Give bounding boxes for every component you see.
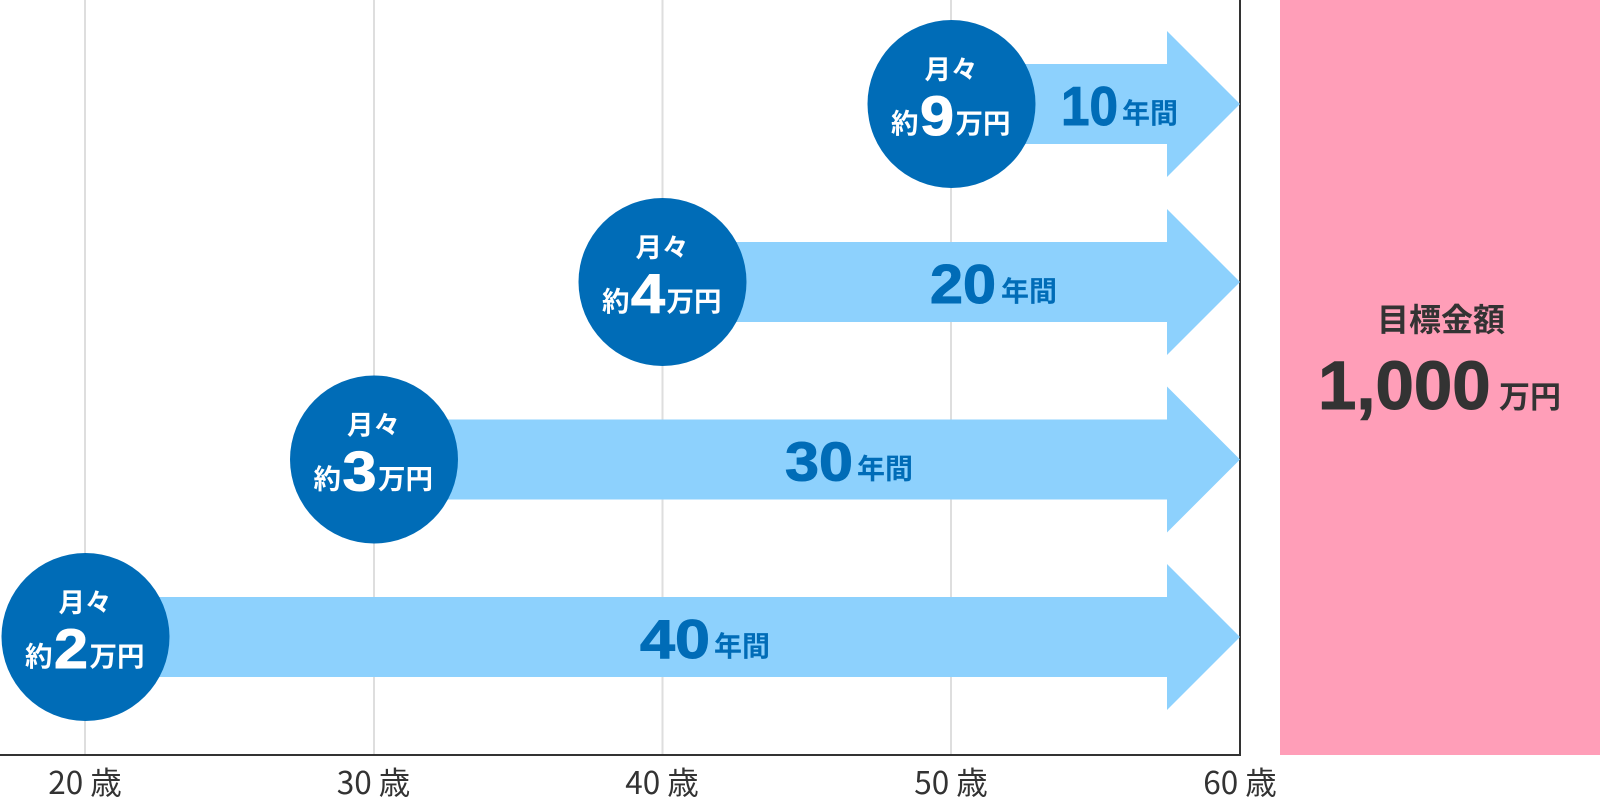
badge: monthly 9万円: [868, 20, 1036, 188]
arrow: 40 years: [85, 564, 1240, 710]
arrow: 20 years: [662, 209, 1240, 355]
arrow: 10 years: [951, 31, 1240, 177]
duration label: 40 years: 40: [640, 608, 710, 670]
duration label: 20 years: 20: [930, 253, 996, 315]
duration label: 30 years: 年間: [857, 454, 913, 484]
badge: monthly 3万円: 3: [342, 440, 376, 502]
duration label: 10 years: 年間: [1122, 98, 1178, 129]
badge: monthly 9万円: 約: [891, 108, 918, 139]
duration label: 40 years: [640, 608, 770, 670]
badge: monthly 4万円: 約: [602, 286, 630, 317]
badge: monthly 2万円: 月々: [58, 588, 112, 618]
target amount value: 1,000: [1318, 347, 1491, 424]
badge: monthly 3万円: 万円: [378, 464, 433, 494]
duration label: 20 years: [930, 253, 1057, 315]
badge: monthly 2万円: 万円: [90, 641, 144, 672]
age axis labels: [48, 758, 1277, 800]
panel: target amount: [1280, 0, 1600, 755]
badge: monthly 4万円: 月々: [636, 233, 688, 263]
badge: monthly 9万円: 万円: [956, 108, 1010, 139]
arrow: 30 years: [374, 386, 1240, 532]
badge: monthly 3万円: 月々: [347, 410, 400, 440]
badge: monthly 9万円: 9: [920, 84, 954, 147]
badge: monthly 4万円: [578, 198, 746, 366]
duration label: 20 years: 年間: [1001, 276, 1057, 307]
badge: monthly 2万円: 2: [54, 617, 88, 680]
chart axis lines: [0, 0, 1240, 755]
badge: monthly 2万円: [2, 553, 170, 721]
badge: monthly 3万円: [290, 376, 458, 544]
duration label: 40 years: 年間: [714, 631, 770, 662]
duration label: 10 years: [1061, 75, 1178, 137]
badge: monthly 4万円: 万円: [666, 286, 722, 317]
badge: monthly 9万円: 月々: [924, 55, 978, 85]
badge: monthly 2万円: 約: [25, 641, 52, 672]
badge: monthly 4万円: 4: [631, 262, 665, 325]
badge: monthly 3万円: 約: [314, 464, 341, 494]
duration label: 10 years: 10: [1061, 75, 1118, 137]
duration label: 30 years: [785, 430, 913, 492]
duration label: 30 years: 30: [785, 430, 853, 492]
target amount value: 万円: [1499, 380, 1561, 415]
target amount heading: 目標金額: [1377, 302, 1505, 338]
